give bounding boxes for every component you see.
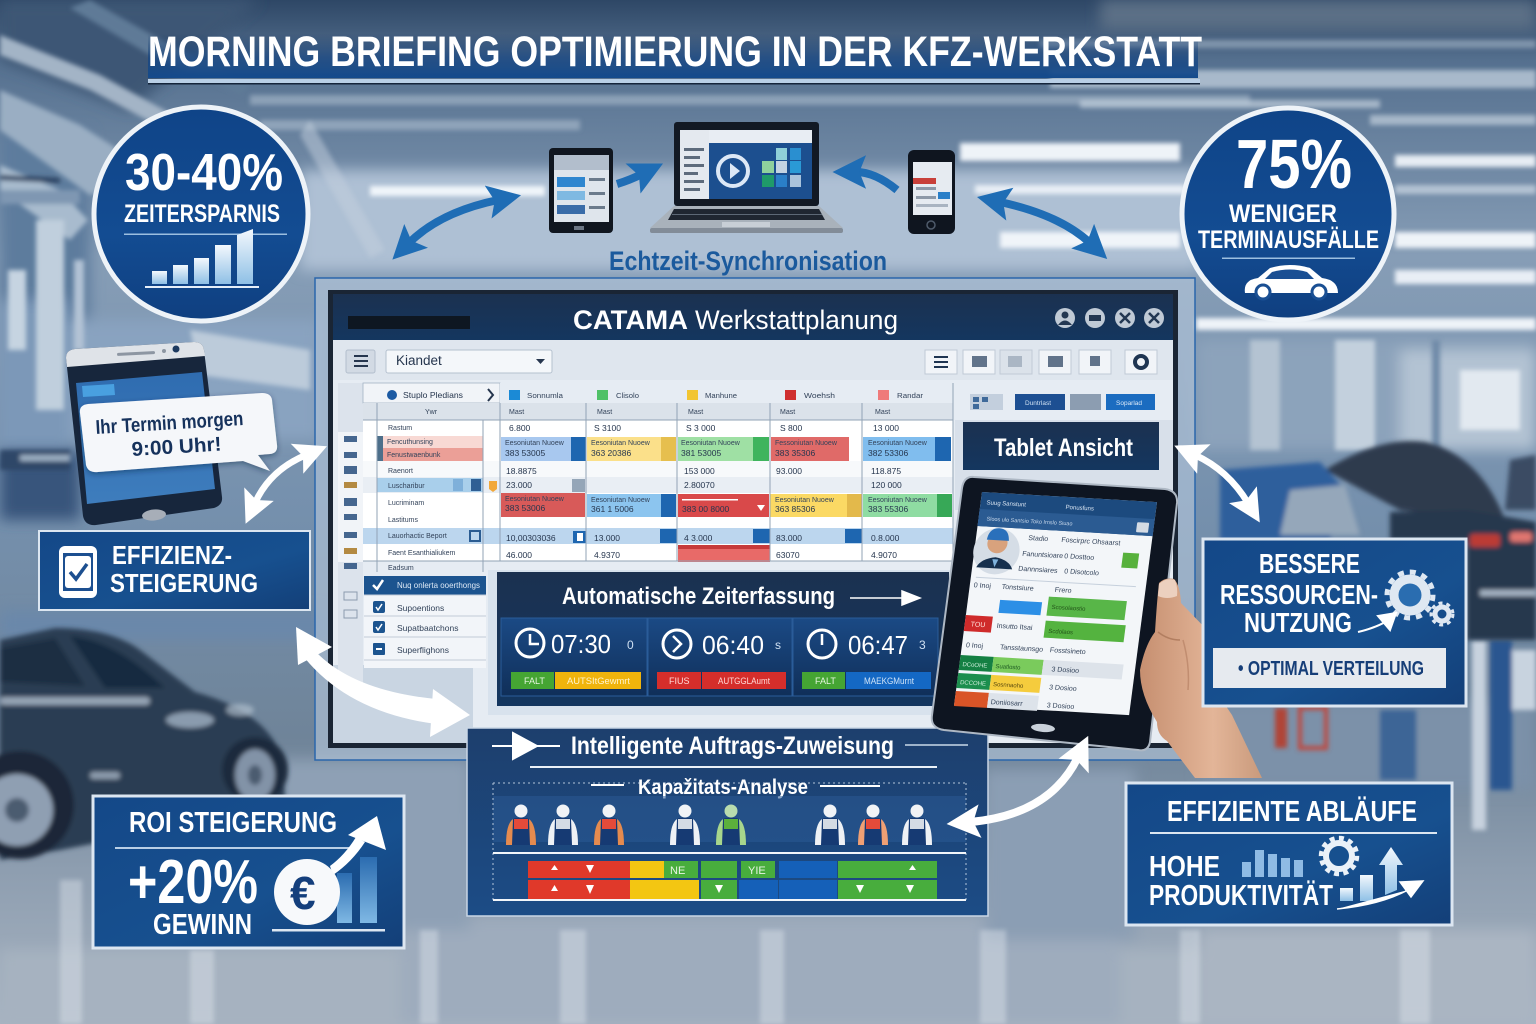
column heads: Mast — [780, 409, 795, 416]
schedule cells row 1 numbers: 46.000 — [506, 550, 532, 560]
worker figures — [506, 804, 932, 845]
tablet screen: DCCOHE — [960, 680, 986, 688]
schedule cells row 1 numbers: 4.9370 — [594, 550, 620, 560]
clock card 1: 0 — [627, 638, 634, 652]
schedule cells row 1 numbers: 120 000 — [871, 480, 902, 490]
schedule cells row 1 numbers: 2.80070 — [684, 480, 715, 490]
panel: Automatische Zeiterfassung: Automatische Zeiterfassung — [562, 583, 835, 610]
background car left — [0, 620, 288, 860]
legend row: Manhune — [705, 393, 737, 400]
schedule coloured blocks row 5: Eesoniutan Nuoew — [591, 497, 651, 504]
tablet screen: Sloos ulo Santsio Toko Irnslo Siuao — [986, 516, 1073, 527]
panel: ROI Steigerung: ROI STEIGERUNG — [129, 807, 337, 839]
arrow: phone to laptop — [856, 172, 897, 190]
panel: Effizienz-Steigerung — [39, 531, 310, 610]
tablet screen: 0 Dosttoo — [1064, 553, 1095, 562]
task checklist: Nuq onlerta ooerthongs — [397, 580, 480, 590]
schedule cells row 1 numbers: 93.000 — [776, 466, 802, 476]
tablet screen: Ponusfuns — [1065, 505, 1094, 513]
callout: optimal Verteilung: • OPTIMAL VERTEILUNG — [1238, 658, 1424, 680]
clock card 3: MAEKGMurnt — [864, 676, 914, 686]
tablet screen: Doniiosarr — [990, 699, 1024, 708]
icon: euro coin — [274, 859, 340, 925]
panel: Tablet Ansicht header: Tablet Ansicht — [994, 434, 1134, 462]
column heads: Mast — [509, 409, 524, 416]
column heads: Mast — [688, 409, 703, 416]
tablet device — [932, 477, 1177, 750]
stat circle: 75% weniger Terminausfälle: WENIGER — [1229, 200, 1337, 228]
schedule coloured blocks row 2: 383 53005 — [505, 448, 545, 458]
schedule cells row 1 numbers: 13.000 — [594, 533, 620, 543]
schedule cells row 1 numbers: S 3 000 — [686, 423, 716, 433]
icon: laptop — [650, 122, 843, 233]
tablet screen: TOU — [970, 621, 986, 629]
panel: Effiziente Abläufe: HOHE — [1149, 851, 1220, 883]
schedule coloured blocks row 2: 383 35306 — [775, 448, 815, 458]
schedule coloured blocks row 2: Eesoniutan Nuoew — [868, 440, 928, 447]
tablet home button — [1031, 723, 1055, 733]
subheading: Kapazität: Kapažitats-Analyse — [638, 776, 808, 799]
callout: optimal Verteilung — [1213, 648, 1446, 688]
tablet screen: Stadio — [1028, 535, 1049, 543]
clock card 2 — [648, 618, 792, 696]
schedule coloured blocks row 2: 363 20386 — [591, 448, 631, 458]
schedule coloured blocks row 2: Eesoniutan Nuoew — [591, 440, 651, 447]
tablet screen: Fanuntsioare — [1022, 551, 1063, 560]
task checklist: Superflighons — [397, 645, 449, 655]
icon: tablet — [549, 148, 613, 233]
tablet screen: Foscirprc Ohsaarst — [1061, 537, 1121, 547]
tablet screen: 0 Inoj — [973, 582, 992, 590]
capacity bars: YIE — [748, 865, 766, 877]
schedule cells row 1 numbers: 0.8.000 — [871, 533, 900, 543]
clock card 2: AUTGGLAumt — [718, 676, 770, 686]
tablet screen: Tansstaunsgo — [999, 644, 1044, 654]
schedule coloured blocks row 2: Eesoniutan Nuoew — [505, 440, 565, 447]
tablet screen: Scdolaos — [1048, 629, 1073, 636]
ceiling beams left — [0, 0, 310, 470]
schedule coloured blocks row 5: 383 55306 — [868, 504, 908, 514]
schedule coloured blocks row 5 — [501, 493, 952, 562]
panel: ROI Steigerung — [93, 796, 404, 948]
schedule coloured blocks row 5: Eesoniutan Nuoew — [775, 497, 835, 504]
row labels: Fenustwaenbunk — [387, 452, 441, 459]
ceiling stripes top — [250, 40, 1536, 330]
clock card 1: AUTSItGewmrt — [567, 676, 631, 686]
schedule coloured blocks row 5: 363 85306 — [775, 504, 815, 514]
tablet screen: DCoOHE — [962, 662, 988, 670]
label: Echtzeit-Synchronisation: Echtzeit-Synchronisation — [609, 246, 887, 276]
arrow — [492, 733, 560, 759]
arrow: workers to tablet — [970, 757, 1078, 822]
tablet screen: 0 Inoj — [965, 642, 984, 650]
clock card 1: FALT — [524, 676, 545, 686]
panel: CATAMA planning window — [328, 290, 1178, 748]
speech bubble: Ihr Termin morgen — [95, 408, 244, 439]
schedule coloured blocks row 5: 383 00 8000 — [682, 504, 730, 514]
hand holding tablet — [1140, 578, 1262, 778]
right sidebar tool chips — [970, 394, 1155, 410]
speech bubble: 9:00 Uhr! — [131, 434, 222, 461]
panel: Effiziente Abläufe — [1126, 783, 1452, 925]
panel: ROI Steigerung: GEWINN — [153, 909, 252, 941]
row labels: Eadsum — [388, 565, 414, 572]
legend row: Sonnumla — [527, 393, 563, 400]
grid lines — [363, 383, 953, 572]
task checklist — [364, 576, 486, 668]
row labels: Lastitums — [388, 517, 418, 524]
icon: smartphone — [66, 342, 222, 525]
right sidebar tool chips: Soparlad — [1116, 400, 1142, 407]
schedule cells row 1 numbers: 83.000 — [776, 533, 802, 543]
schedule cells row 1 numbers: 63070 — [776, 550, 800, 560]
workers row — [506, 804, 932, 845]
tablet screen: 3 Dosioo — [1049, 684, 1077, 693]
callout: phone reminder — [66, 342, 277, 525]
panel: ROI Steigerung: +20% — [128, 848, 258, 917]
window title bar — [333, 294, 1173, 340]
schedule coloured blocks row 5: Eesoniutan Nuoew — [505, 496, 565, 503]
clock card 2: 06:40 — [702, 630, 764, 660]
column heads: Ywr — [425, 409, 438, 416]
panel: Bessere Ressourcen-Nutzung: NUTZUNG — [1244, 607, 1352, 638]
schedule cells row 1 numbers: 6.800 — [509, 423, 531, 433]
schedule coloured blocks row 5: Eesoniutan Nuoew — [868, 497, 928, 504]
stat circle: 30-40% Zeitersparnis: ZEITERSPARNIS — [124, 200, 280, 228]
arrow: Effizienz to Intelligente — [296, 627, 470, 737]
panel: Bessere Ressourcen-Nutzung — [1203, 539, 1466, 706]
column heads — [425, 409, 890, 416]
row labels: Raenort — [388, 468, 413, 475]
schedule coloured blocks row 2: 382 53306 — [868, 448, 908, 458]
schedule cells row 1 numbers: 18.8875 — [506, 466, 537, 476]
schedule cells row 1 numbers: S 3100 — [594, 423, 621, 433]
stat circle: 75% weniger Terminausfälle: TERMINAUSFÄLLE — [1198, 226, 1379, 254]
panel: Intelligente Auftrags-Zuweisung: Intelligente Auftrags-Zuweisung — [571, 732, 894, 760]
stat circle: 75% weniger Terminausfälle: 75% — [1236, 125, 1352, 203]
clock card 3: FALT — [815, 676, 836, 686]
tablet screen: Suatlosto — [995, 664, 1021, 672]
arrow: right double sync — [1000, 202, 1090, 243]
legend row: Randar — [897, 393, 924, 400]
panel: Effizienz-Steigerung: STEIGERUNG — [110, 568, 258, 598]
schedule cells row 1 numbers: 10,00303036 — [506, 533, 556, 543]
title: MORNING BRIEFING OPTIMIERUNG IN DER KFZ-WERKSTATT — [148, 28, 1202, 76]
schedule cells row 1 numbers: 118.875 — [871, 466, 901, 476]
panel: Effiziente Abläufe: PRODUKTIVITÄT — [1149, 879, 1333, 912]
clock card 2: FIUS — [669, 676, 690, 686]
clock card 3: 3 — [919, 638, 926, 652]
planning table — [363, 383, 953, 572]
panel: Automatische Zeiterfassung — [488, 570, 950, 715]
panel: Intelligente Auftrags-Zuweisung — [467, 728, 988, 916]
sync devices — [409, 122, 1090, 243]
clock card 1 — [501, 618, 647, 696]
window title bar: Werkstattplanung — [695, 305, 898, 335]
panel: Effizienz-Steigerung: EFFIZIENZ- — [112, 540, 232, 570]
tablet screen: Suug Sanstunt — [986, 500, 1027, 509]
stat circle: 75% weniger Terminausfälle — [1182, 108, 1394, 320]
clock card 1: 07:30 — [551, 629, 611, 659]
arrow: phone to window — [255, 455, 306, 503]
stat circle: 30-40% Zeitersparnis: 30-40% — [125, 144, 283, 202]
clock card 3 — [793, 618, 938, 696]
arrow — [850, 591, 920, 605]
left icon strip — [338, 383, 363, 683]
chart: bars and arrow — [330, 816, 386, 923]
panel: Effiziente Abläufe: EFFIZIENTE ABLÄUFE — [1167, 795, 1417, 828]
row labels: Rastum — [388, 425, 412, 432]
schedule coloured blocks row 2: 381 53005 — [681, 448, 721, 458]
icon: gears — [1358, 572, 1453, 632]
row labels: Fencuthunsing — [387, 439, 433, 446]
icon: phone — [908, 150, 955, 234]
legend row: Clisolo — [616, 393, 639, 400]
column heads: Mast — [597, 409, 612, 416]
row labels: Lucriminam — [388, 500, 424, 507]
schedule coloured blocks row 5: 383 53006 — [505, 503, 545, 513]
arrow: left double sync — [409, 200, 498, 243]
legend row — [387, 389, 924, 401]
tablet screen: Insutto Itsai — [996, 623, 1033, 632]
row labels: Lauorhactic Beport — [388, 533, 447, 540]
row labels — [377, 425, 497, 572]
column heads: Mast — [875, 409, 890, 416]
arrow: window to Bessere panel — [1195, 455, 1248, 503]
schedule coloured blocks row 2 — [501, 437, 951, 461]
speech bubble — [80, 393, 277, 472]
arrow: tablet to laptop — [617, 174, 642, 184]
chart: productivity icons — [1242, 838, 1423, 909]
schedule cells row 1 numbers: 153 000 — [684, 466, 715, 476]
icon: car — [1245, 265, 1338, 299]
row labels: Luscharibur — [388, 483, 425, 490]
icon: rising bars — [145, 229, 259, 288]
icon: euro coin: € — [290, 867, 316, 919]
background car right with open hood — [1220, 441, 1536, 640]
toolbar: Kiandet — [396, 353, 442, 368]
tablet screen: Scosolaostio — [1051, 605, 1086, 613]
tablet screen — [953, 492, 1157, 716]
stat circle: 30-40% Zeitersparnis — [94, 107, 308, 321]
capacity bars: NE — [670, 865, 685, 877]
panel: Bessere Ressourcen-Nutzung: BESSERE — [1259, 548, 1360, 579]
window title bar: CATAMA — [573, 305, 688, 335]
clock card 2: s — [775, 638, 781, 652]
legend row: Stuplo Pledians — [403, 390, 463, 400]
tablet screen: 0 Disotcolo — [1064, 568, 1099, 577]
tablet screen: 3 Dosioo — [1046, 702, 1075, 711]
legend row: Woehsh — [804, 393, 835, 400]
toolbar — [333, 340, 1173, 380]
tablet screen: Sosnnaoho — [993, 682, 1024, 690]
capacity bars — [528, 861, 937, 899]
schedule coloured blocks row 2: Eesoniutan Nuoew — [681, 440, 741, 447]
row labels: Faent Esanthialiukem — [388, 550, 455, 557]
clock card 3: 06:47 — [848, 630, 908, 660]
task checklist: Supatbaatchons — [397, 623, 458, 633]
schedule cells row 1 numbers — [506, 423, 902, 560]
schedule coloured blocks row 2: Fessoniutan Nuoew — [775, 440, 838, 447]
schedule cells row 1 numbers: S 800 — [780, 423, 802, 433]
schedule cells row 1 numbers: 13 000 — [873, 423, 899, 433]
task checklist: Supoentions — [397, 603, 444, 613]
main window frame — [315, 278, 1195, 760]
right sidebar tool chips: Duntrlast — [1025, 400, 1051, 407]
schedule cells row 1 numbers: 23.000 — [506, 480, 532, 490]
tablet screen: Tonstsiure — [1001, 584, 1034, 593]
icon: phone check — [59, 546, 97, 598]
tablet screen: 3 Dosioo — [1051, 666, 1080, 675]
tablet screen: Dannnsiares — [1018, 566, 1058, 575]
schedule cells row 1 numbers: 4 3.000 — [684, 533, 713, 543]
tablet screen: Fosstsineto — [1049, 647, 1086, 656]
mechanic avatar — [970, 527, 1022, 576]
tablet screen: Frero — [1054, 587, 1072, 595]
schedule coloured blocks row 5: 361 1 5006 — [591, 504, 634, 514]
panel: Tablet Ansicht header — [955, 420, 1173, 510]
schedule cells row 1 numbers: 4.9070 — [871, 550, 897, 560]
panel: Bessere Ressourcen-Nutzung: RESSOURCEN- — [1220, 579, 1378, 610]
